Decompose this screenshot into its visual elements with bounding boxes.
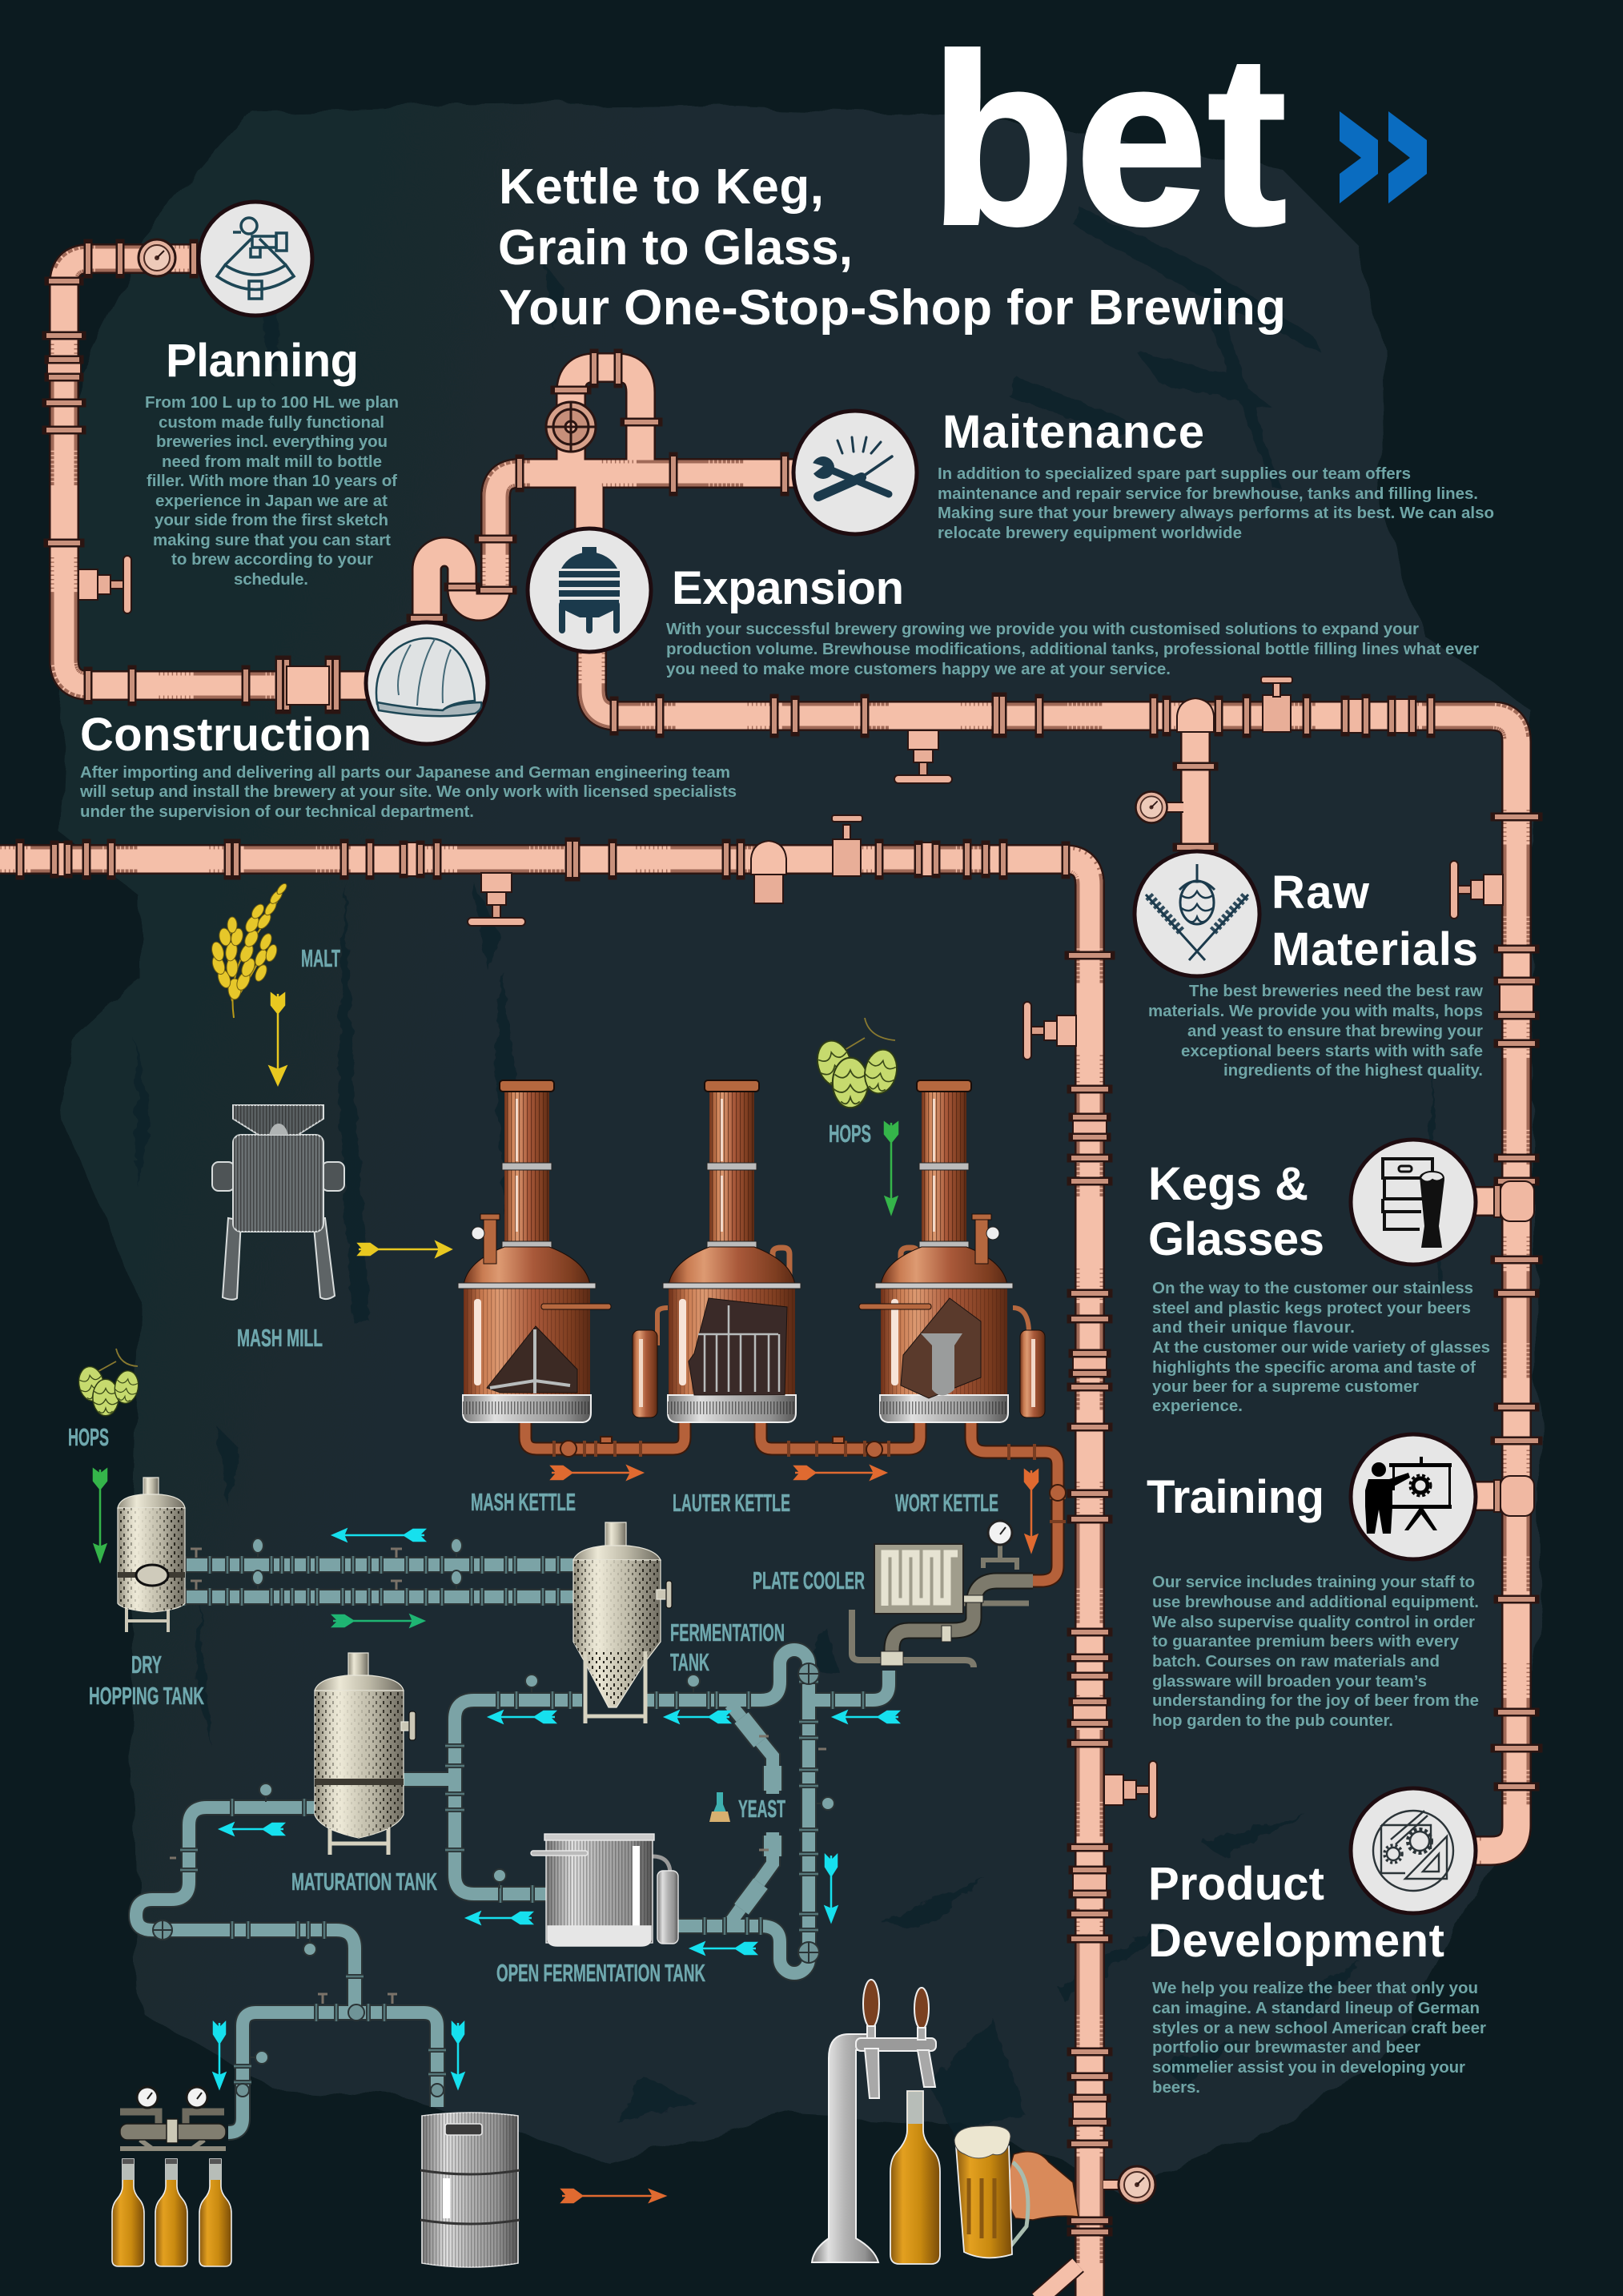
- arrow: mill to mash kettle: [359, 1242, 451, 1257]
- machine: mash mill: [212, 1105, 344, 1300]
- icon: hop and wheat: [1135, 851, 1259, 976]
- icon: hard hat: [366, 622, 488, 744]
- label: mash mill: MASH MILL: [237, 1324, 323, 1352]
- text block: sommelier assist you in developing your: [1152, 2058, 1465, 2077]
- label: malt: MALT: [301, 944, 340, 972]
- fitting: T to kegs: [1494, 1181, 1534, 1221]
- panel: construction: [79, 622, 737, 821]
- label: open fermentation tank: OPEN FERMENTATION TANK: [496, 1959, 705, 1987]
- text block: [145, 393, 399, 589]
- text block: under the supervision of our technical department.: [80, 802, 474, 821]
- icon: sextant: [199, 202, 312, 316]
- arrow: hops to wort kettle: [885, 1123, 898, 1213]
- heading: Maitenance: [942, 406, 1204, 458]
- text block: glassware will broaden your team’s: [1152, 1672, 1427, 1691]
- valve: right riser: [1450, 861, 1503, 919]
- panel: expansion: [528, 529, 1479, 678]
- text block: production volume. Brewhouse modifications, additional tanks, professional bottle filling lines what ever: [666, 640, 1479, 658]
- label: fermentation tank: [670, 1618, 785, 1676]
- arrow: into fermentation: [665, 1711, 729, 1723]
- panel: planning: [145, 202, 399, 589]
- label: hops left: HOPS: [68, 1423, 109, 1451]
- text block: and their unique flavour.: [1152, 1318, 1355, 1337]
- fitting: T to training: [1494, 1476, 1534, 1516]
- text block: We help you realize the beer that only you: [1152, 1979, 1478, 1997]
- heading: Development: [1148, 1915, 1444, 1967]
- fitting: top valve on long pipe: [832, 815, 862, 876]
- text block: We also supervise quality control in order: [1152, 1613, 1475, 1631]
- panel: training: [1147, 1434, 1479, 1730]
- gauge: bottom of centre riser: [1103, 2166, 1155, 2203]
- text block: With your successful brewery growing we provide you with customised solutions to expand your: [666, 620, 1419, 638]
- heading: [1148, 1158, 1324, 1265]
- arrow: open tank to line: [467, 1912, 532, 1924]
- arrow: cooler out: [834, 1711, 898, 1723]
- text block: understanding for the joy of beer from the: [1152, 1691, 1479, 1710]
- arrow: to maturation: [489, 1711, 555, 1723]
- label: dry hopping tank: HOPPING TANK: [89, 1682, 204, 1710]
- label: plate cooler: PLATE COOLER: [753, 1566, 865, 1594]
- vessel: lauter kettle: [633, 1080, 801, 1422]
- heading: Kegs &: [1148, 1158, 1308, 1210]
- valve: planning loop: [78, 556, 131, 613]
- ingredient: hops right: [813, 1018, 901, 1108]
- valve: centre riser left: [1023, 1002, 1076, 1060]
- text block: At the customer our wide variety of glasses: [1152, 1338, 1490, 1357]
- title: [498, 159, 1286, 336]
- heading: Raw: [1271, 867, 1370, 919]
- arrow: wort to cooler: [1025, 1470, 1038, 1551]
- arrow: keg to tap: [562, 2189, 665, 2202]
- text block: The best breweries need the best raw: [1189, 982, 1483, 1000]
- icon: tank: [528, 529, 651, 652]
- heading: Planning: [166, 335, 359, 387]
- heading: [1271, 867, 1478, 975]
- icon: trainer and board: [1351, 1434, 1476, 1559]
- text block: materials. We provide you with malts, hops: [1148, 1002, 1483, 1020]
- text block: [666, 620, 1479, 678]
- text block: hop garden to the pub counter.: [1152, 1711, 1393, 1730]
- heading: Expansion: [672, 562, 904, 614]
- text block: exceptional beers starts with with safe: [1181, 1042, 1483, 1060]
- heading: Product: [1148, 1858, 1324, 1910]
- icon: yeast flask: [709, 1792, 730, 1822]
- heading: Materials: [1271, 923, 1478, 975]
- text block: [1152, 1573, 1479, 1730]
- text block: [1152, 1279, 1490, 1415]
- text block: Our service includes training your staff to: [1152, 1573, 1475, 1591]
- text block: On the way to the customer our stainless: [1152, 1279, 1473, 1297]
- text block: [938, 464, 1494, 542]
- arrow: hops to dry tank: [94, 1470, 106, 1561]
- text block: highlights the specific aroma and taste of: [1152, 1358, 1476, 1377]
- valve: centre riser right: [1104, 1761, 1157, 1819]
- teal pipe fittings: [153, 1538, 834, 2097]
- copper wort pipes: [525, 1419, 1066, 1581]
- text block: you need to make more customers happy we are at your service.: [666, 660, 1171, 678]
- valve: long pipe underside: [468, 873, 525, 926]
- arrow: from maturation: [220, 1824, 283, 1835]
- panel: kegs and glasses: [1148, 1140, 1490, 1415]
- text block: relocate brewery equipment worldwide: [938, 524, 1242, 542]
- text block: styles or a new school American craft beer: [1152, 2019, 1486, 2037]
- panel: raw materials: [1135, 851, 1483, 1080]
- fitting: T on expansion pipe: [1177, 698, 1214, 732]
- gauge: raw materials branch: [1135, 791, 1183, 823]
- bottles: filled row: [112, 2159, 231, 2266]
- logo: blue chevrons: [1340, 111, 1427, 203]
- pipe: bottom branch: [1038, 2265, 1078, 2296]
- fitting: top valve on expansion pipe: [1261, 677, 1292, 732]
- label: lauter kettle: LAUTER KETTLE: [673, 1489, 790, 1517]
- text block: schedule.: [234, 570, 308, 589]
- vessel: fermentation tank: [573, 1522, 672, 1723]
- label: fermentation tank: FERMENTATION: [670, 1618, 785, 1647]
- panel: maintenance: [793, 406, 1494, 542]
- arrow: down centre line: [826, 1856, 837, 1921]
- text block: Making sure that your brewery always performs at its best. We can also: [938, 504, 1494, 522]
- text block: making sure that you can start: [153, 531, 391, 549]
- text block: ingredients of the highest quality.: [1223, 1061, 1483, 1080]
- text block: steel and plastic kegs protect your beers: [1152, 1299, 1471, 1317]
- text block: maintenance and repair service for brewhouse, tanks and filling lines.: [938, 485, 1478, 503]
- heading: Glasses: [1148, 1213, 1324, 1265]
- coupling: construction pipe: [287, 666, 329, 705]
- machine: plate cooler: [852, 1521, 1033, 1667]
- text block: portfolio our brewmaster and beer: [1152, 2038, 1420, 2057]
- text block: custom made fully functional: [159, 413, 384, 432]
- small valves: [170, 1549, 826, 2004]
- arrow: malt to mill: [270, 994, 286, 1084]
- vessel: wort kettle: [859, 1080, 1045, 1422]
- text block: your side from the first sketch: [155, 511, 388, 529]
- text block: [79, 763, 737, 821]
- machine: bottle filler: [120, 2087, 226, 2149]
- label: hops right: HOPS: [829, 1120, 871, 1148]
- arrow: down to filler: [214, 2023, 225, 2088]
- label: dry hopping tank: DRY: [131, 1651, 162, 1679]
- text block: use brewhouse and additional equipment.: [1152, 1593, 1479, 1611]
- text block: beers.: [1152, 2078, 1200, 2097]
- beer tap: [812, 1980, 936, 2262]
- label: fermentation tank: TANK: [670, 1648, 709, 1676]
- keg: [420, 2113, 520, 2267]
- label: wort kettle: WORT KETTLE: [895, 1489, 998, 1517]
- text block: to brew according to your: [171, 550, 373, 569]
- text block: [1148, 982, 1483, 1080]
- text block: can imagine. A standard lineup of German: [1152, 1999, 1480, 2017]
- icon: wrench and screwdriver: [793, 411, 917, 534]
- text block: to guarantee premium beers with every: [1152, 1632, 1460, 1651]
- arrow: into open tank: [691, 1943, 756, 1954]
- pipe collars: [54, 360, 1517, 2122]
- vessel: dry hopping tank: [118, 1478, 185, 1632]
- label: dry hopping tank: [89, 1651, 204, 1710]
- label: yeast: YEAST: [738, 1795, 785, 1823]
- heading: Training: [1147, 1471, 1324, 1523]
- fitting: stub on long pipe: [751, 841, 786, 903]
- title: Your One-Stop-Shop for Brewing: [499, 280, 1286, 336]
- ingredient: malt: [210, 882, 288, 1018]
- title: Grain to Glass,: [498, 220, 853, 275]
- valve wheel: expansion loop: [546, 402, 596, 452]
- label: maturation tank: MATURATION TANK: [291, 1868, 437, 1896]
- panel: product development: [1148, 1788, 1486, 2097]
- gauge: planning pipe: [139, 239, 175, 276]
- beer mug with hand: [954, 2126, 1079, 2258]
- text block: After importing and delivering all parts our Japanese and German engineering team: [80, 763, 730, 782]
- text block: In addition to specialized spare part supplies our team offers: [938, 464, 1411, 483]
- text block: filler. With more than 10 years of: [147, 472, 397, 490]
- text block: experience.: [1152, 1397, 1243, 1415]
- icon: blueprint tools: [1351, 1788, 1476, 1913]
- title: Kettle to Keg,: [499, 159, 824, 215]
- vessel: open fermentation tank: [531, 1834, 678, 1946]
- arrow: down to keg: [452, 2023, 464, 2088]
- text block: and yeast to ensure that brewing your: [1187, 1022, 1483, 1040]
- text block: need from malt mill to bottle: [162, 452, 382, 471]
- heading: [1148, 1858, 1444, 1967]
- ingredient: hops left: [76, 1349, 141, 1416]
- text block: breweries incl. everything you: [156, 432, 388, 451]
- gauges: [250, 1538, 834, 2064]
- icon: keg and glass: [1351, 1140, 1476, 1265]
- valve wheels: [153, 1663, 819, 2097]
- arrow: lauter to wort: [795, 1466, 886, 1479]
- text block: experience in Japan we are at: [155, 492, 388, 510]
- bottle beside tap: [890, 2091, 940, 2264]
- logo: bet wordmark: bet: [930, 5, 1287, 275]
- label: mash kettle: MASH KETTLE: [471, 1488, 576, 1516]
- text block: batch. Courses on raw materials and: [1152, 1652, 1440, 1671]
- teal process pipes: [136, 1556, 889, 2133]
- text block: will setup and install the brewery at your site. We only work with licensed specialists: [79, 782, 737, 801]
- text block: [1152, 1979, 1486, 2097]
- arrow: to dry hopping: [333, 1530, 424, 1541]
- text block: From 100 L up to 100 HL we plan: [145, 393, 399, 412]
- vessel: maturation tank: [315, 1653, 416, 1855]
- pipe fittings and valves: [78, 239, 1534, 2203]
- text block: your beer for a supreme customer: [1152, 1377, 1419, 1396]
- vessel: mash kettle: [458, 1080, 611, 1422]
- arrow: from dry hopping: [333, 1615, 424, 1627]
- heading: Construction: [80, 709, 372, 761]
- arrow: mash to lauter: [552, 1466, 642, 1479]
- valve: expansion pipe underside: [894, 730, 952, 783]
